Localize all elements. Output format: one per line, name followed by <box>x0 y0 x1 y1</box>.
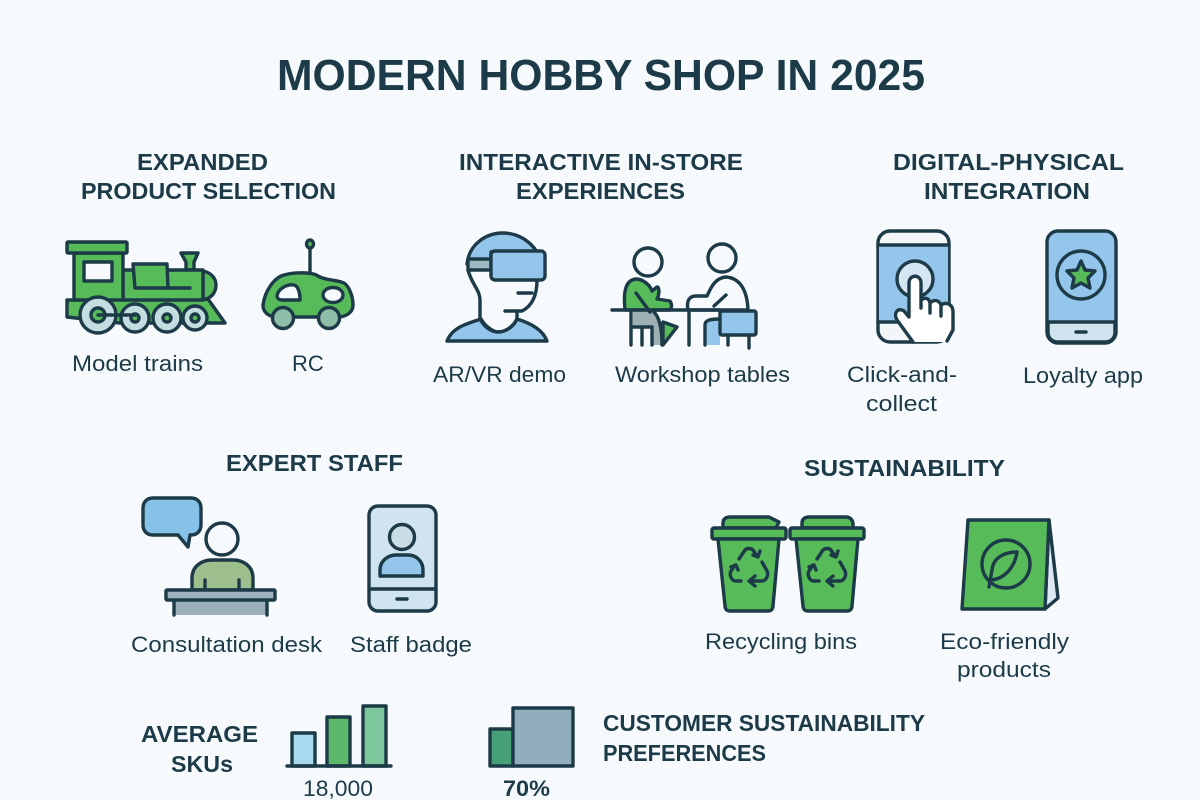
label: AR/VR demo: AR/VR demo <box>433 362 566 387</box>
label: RC: RC <box>292 351 324 376</box>
heading: customer sustainability preferences: PREFERENCES <box>603 740 766 766</box>
bar chart: average SKUs <box>287 706 391 766</box>
label: loyalty app: Loyalty app <box>1023 363 1143 388</box>
heading: digital-physical integration: INTEGRATION <box>924 178 1090 204</box>
panel: average SKUs <box>141 706 391 800</box>
heading: expanded product selection: EXPANDED <box>137 149 268 175</box>
heading: average SKUs: AVERAGE <box>141 721 258 747</box>
label: recycling bins: Recycling bins <box>705 629 857 654</box>
heading: digital-physical integration: DIGITAL-PHYSICAL <box>893 149 1124 175</box>
icon: click-and-collect phone <box>878 231 953 342</box>
panel: interactive in-store experiences <box>433 149 790 387</box>
panel: expanded product selection <box>67 149 353 376</box>
label: eco-friendly products <box>940 629 1069 682</box>
heading: customer sustainability preferences <box>603 710 925 766</box>
label: model trains: Model trains <box>72 351 203 376</box>
heading: average SKUs <box>141 721 258 777</box>
icon: eco-friendly tent card <box>962 520 1058 609</box>
icon: staff badge <box>369 506 436 611</box>
bar chart: sustainability preferences <box>490 708 573 766</box>
label: workshop tables: Workshop tables <box>615 362 790 387</box>
icon: loyalty app phone <box>1047 231 1116 343</box>
heading: average SKUs: SKUs <box>171 751 233 777</box>
label: staff badge: Staff badge <box>350 632 472 657</box>
icon: model train <box>67 242 225 333</box>
label: consultation desk: Consultation desk <box>131 632 323 657</box>
heading: interactive in-store experiences: EXPERIENCES <box>516 178 685 204</box>
panel: customer sustainability preferences <box>490 708 925 800</box>
icon: RC car <box>263 240 353 328</box>
icon: recycling bins <box>712 517 864 611</box>
heading: interactive in-store experiences: INTERACTIVE IN-STORE <box>459 149 743 175</box>
icon: consultation desk <box>143 498 275 615</box>
label: click-and-collect <box>847 362 957 416</box>
heading: expanded product selection: PRODUCT SELECTION <box>81 178 336 204</box>
heading: expanded product selection <box>81 149 336 204</box>
heading: sustainability: SUSTAINABILITY <box>804 455 1005 481</box>
label: eco-friendly products: products <box>957 657 1051 682</box>
panel: expert staff <box>131 450 472 657</box>
title: MODERN HOBBY SHOP IN 2025 <box>277 51 925 100</box>
heading: customer sustainability preferences: CUSTOMER SUSTAINABILITY <box>603 710 925 736</box>
label: click-and-collect: collect <box>866 391 937 416</box>
heading: digital-physical integration <box>893 149 1124 204</box>
icon: workshop tables <box>612 244 756 348</box>
label: eco-friendly products: Eco-friendly <box>940 629 1069 654</box>
label: click-and-collect: Click-and- <box>847 362 957 387</box>
heading: interactive in-store experiences <box>459 149 743 204</box>
panel: digital-physical integration <box>847 149 1143 416</box>
heading: expert staff: EXPERT STAFF <box>226 450 403 476</box>
panel: sustainability <box>705 455 1069 682</box>
icon: AR/VR headset user <box>447 233 547 341</box>
